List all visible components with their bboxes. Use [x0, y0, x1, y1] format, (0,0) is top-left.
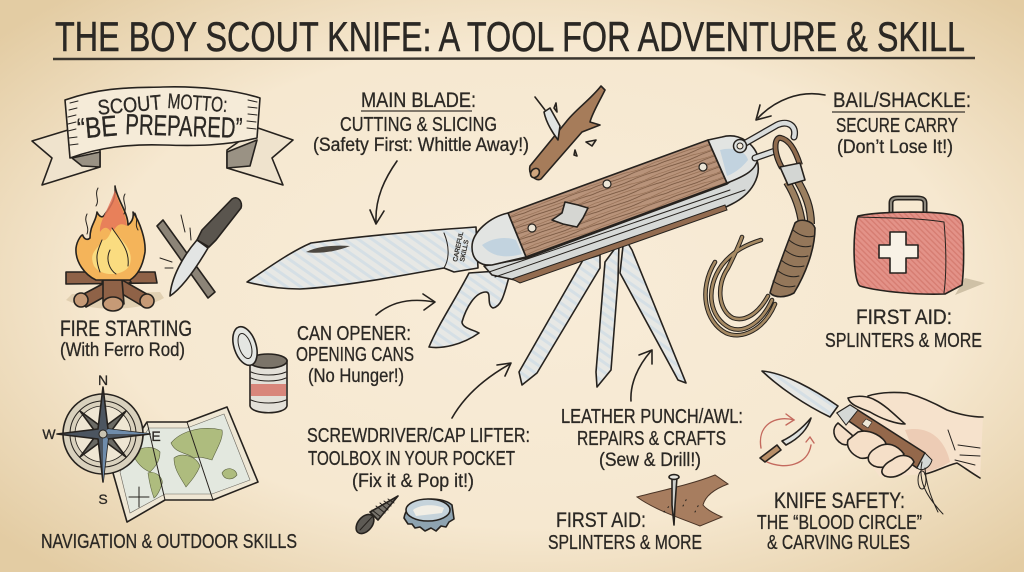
bail shackle: [734, 123, 795, 158]
continents: [133, 428, 237, 498]
icon: leather and nail: [637, 475, 728, 526]
ferrule: [780, 163, 805, 185]
motto text: MOTTO:: [167, 90, 228, 117]
fingers: [834, 423, 853, 445]
map rose: [129, 487, 149, 507]
nail: [672, 477, 677, 525]
icon: bottle cap: [404, 499, 454, 531]
label: main blade: MAIN BLADE:: [361, 89, 476, 112]
label: bail shackle: [832, 89, 971, 158]
banner: scout motto: [32, 87, 293, 185]
tool: main blade: [247, 227, 478, 289]
tool: screwdriver: [519, 255, 600, 385]
wood scale: [508, 140, 727, 257]
label: knife safety: [757, 488, 922, 554]
label: can opener: [296, 323, 414, 387]
label: main blade: (Safety First: Whittle Away!): [313, 135, 529, 156]
label: fire starting: (With Ferro Rod): [60, 340, 185, 361]
tool: can opener: [429, 270, 511, 347]
icon: screw: [353, 496, 398, 537]
label: main blade: [313, 89, 529, 156]
cord loop: [775, 138, 800, 168]
label: fire starting: [60, 316, 192, 361]
tiny wood stick: [760, 445, 781, 462]
tool: main blade: CAREFUL: [452, 231, 465, 262]
knife: [247, 136, 758, 387]
label: knife safety: & CARVING RULES: [767, 532, 910, 554]
compass directions: W: [42, 426, 56, 442]
label: leather punch: [561, 406, 743, 471]
right bolster: [708, 136, 758, 183]
arrow: main blade: [370, 161, 397, 224]
left bolster: [472, 213, 526, 265]
label: leather punch: (Sew & Drill!): [599, 450, 701, 471]
arrow: can opener: [376, 294, 435, 315]
wood chips: [554, 103, 596, 156]
thumb: [848, 396, 905, 424]
label: first aid centre: [548, 509, 702, 554]
arrow: awl: [631, 350, 652, 401]
label: bail shackle: (Don’t Lose It!): [837, 137, 953, 158]
small lanyard: [921, 462, 943, 514]
banner right tail: [227, 128, 293, 185]
kit body: [854, 212, 964, 294]
label: screwdriver: TOOLBOX IN YOUR POCKET: [308, 448, 515, 470]
small blade: [762, 371, 838, 417]
label: first aid: FIRST AID:: [856, 306, 952, 329]
handle liners: [484, 160, 758, 280]
icon: ferro rod and knife: [157, 198, 241, 298]
tool: leather punch: [596, 243, 619, 387]
bail and lanyard: [705, 123, 815, 335]
icon: blood circle arrows: [760, 414, 814, 466]
label: first aid: SPLINTERS & MORE: [825, 330, 982, 352]
label: leather punch: LEATHER PUNCH/AWL:: [561, 406, 743, 428]
motto text: “BE: [76, 110, 119, 146]
tiny blade: [782, 418, 811, 445]
shield inlay: [552, 202, 588, 227]
label: screwdriver: SCREWDRIVER/CAP LIFTER:: [307, 425, 530, 447]
whittling knife: [544, 108, 560, 140]
twig: [530, 86, 605, 180]
palm: [845, 393, 983, 478]
label: can opener: CAN OPENER:: [297, 323, 411, 345]
arrow: screwdriver: [452, 363, 511, 418]
flames: [76, 186, 145, 280]
icon: campfire: [66, 186, 164, 311]
label: navigation: NAVIGATION & OUTDOOR SKILLS: [41, 531, 297, 553]
compass directions: S: [98, 491, 108, 507]
compass directions: E: [151, 428, 161, 444]
motto text: [76, 90, 243, 146]
pins: [528, 163, 707, 232]
label: bail shackle: BAIL/SHACKLE:: [833, 89, 971, 112]
can lid: [228, 324, 262, 368]
label: screwdriver: (Fix it & Pop it!): [352, 471, 474, 492]
kit handle: [891, 198, 925, 214]
label: can opener: OPENING CANS: [296, 344, 414, 366]
label: fire starting: FIRE STARTING: [60, 316, 192, 341]
knot: [770, 220, 815, 297]
smoke wisps: [86, 188, 138, 234]
icon: can: [228, 324, 287, 413]
spark marks: [160, 215, 191, 268]
icon: first aid kit: [854, 198, 985, 295]
fixed blade knife: [170, 240, 208, 296]
label: screwdriver: [307, 425, 530, 492]
label: main blade: CUTTING & SLICING: [340, 114, 497, 136]
label: first aid centre: FIRST AID:: [556, 509, 646, 532]
arrow: bail shackle: [756, 94, 825, 120]
banner left tail: [32, 130, 100, 185]
logs: [66, 272, 157, 311]
tool: awl: [620, 237, 686, 383]
compass star: [80, 411, 126, 457]
compass directions: N: [98, 372, 108, 388]
small knife handle: [837, 405, 925, 468]
label: first aid centre: SPLINTERS & MORE: [548, 532, 702, 554]
ferro rod: [157, 220, 215, 298]
icon: folded map: [113, 407, 258, 522]
icon: twig whittling: [529, 86, 605, 180]
icon: hand holding knife: [762, 371, 983, 514]
label: knife safety: THE “BLOOD CIRCLE”: [757, 512, 922, 534]
motto text: PREPARED”: [125, 109, 243, 145]
banner body: [65, 87, 260, 158]
tool: main blade: SKILLS: [459, 239, 471, 262]
compass directions: [42, 372, 161, 507]
label: can opener: (No Hunger!): [308, 366, 404, 387]
cord strands: [787, 180, 811, 224]
icon: compass: [42, 372, 161, 507]
label: leather punch: REPAIRS & CRAFTS: [577, 428, 726, 450]
motto text: SCOUT: [97, 91, 163, 120]
label: first aid: [825, 306, 982, 352]
white cross: [879, 232, 918, 273]
label: bail shackle: SECURE CARRY: [836, 115, 958, 137]
cord hook: [705, 237, 775, 335]
banner folds: [72, 140, 257, 168]
label: knife safety: KNIFE SAFETY:: [774, 488, 905, 513]
